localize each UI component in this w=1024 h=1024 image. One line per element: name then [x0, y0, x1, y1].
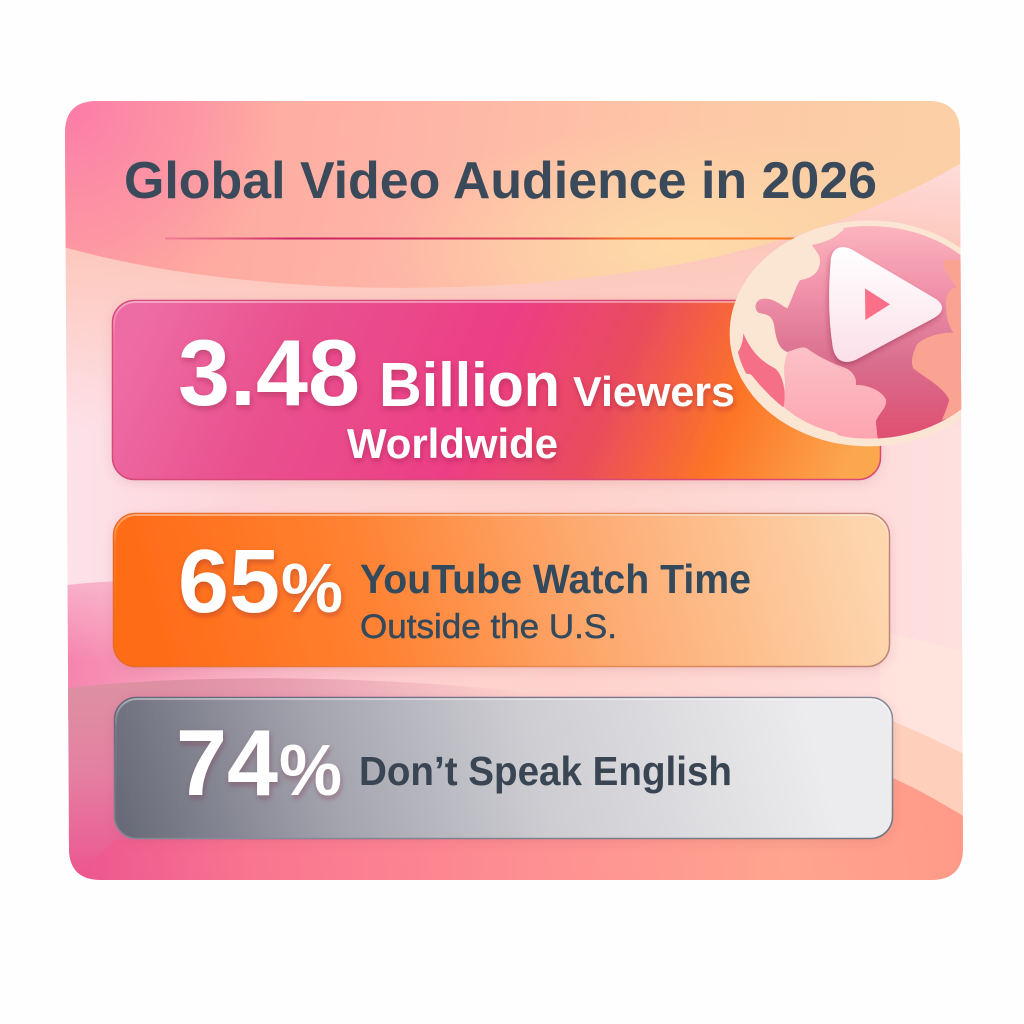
stat: 3.48 Billion Viewers: Viewers — [573, 368, 735, 415]
title divider — [165, 238, 798, 240]
globe sea — [756, 223, 967, 440]
label: YouTube Watch Time Outside the U.S.: Outside the U.S. — [360, 608, 617, 646]
icon: globe with play button — [730, 220, 962, 446]
stat: 74%: 74 — [176, 710, 278, 815]
stat: 3.48 Billion Viewers: 3.48 — [178, 320, 360, 425]
lower left land — [738, 334, 785, 408]
stat: 3.48 Billion Viewers — [178, 320, 735, 467]
stat: 74%: % — [279, 731, 342, 811]
label: Don't Speak English: Don’t Speak English — [359, 748, 732, 794]
stat: 74% — [176, 710, 342, 815]
card: 3.48 billion viewers — [112, 300, 880, 480]
panel background — [60, 90, 970, 890]
stat: 65% — [178, 532, 343, 632]
card: 65% watch time — [114, 514, 890, 666]
card: 74% non-English — [114, 698, 892, 838]
title: Global Video Audience in 2026 — [124, 152, 877, 210]
label: YouTube Watch Time Outside the U.S. — [360, 556, 751, 646]
infographic — [65, 101, 963, 880]
stat: 65%: % — [281, 549, 343, 627]
play button — [829, 247, 942, 362]
bottom ring arc — [748, 379, 833, 437]
stat: 3.48 Billion Viewers: Worldwide — [347, 420, 558, 467]
globe continents — [730, 223, 967, 440]
play triangle — [865, 288, 890, 320]
right land — [912, 260, 962, 420]
lower land — [783, 348, 886, 440]
stat: 3.48 Billion Viewers: Billion — [379, 351, 560, 420]
globe ring and pale land — [730, 220, 962, 446]
stat: 65%: 65 — [178, 532, 280, 632]
label: YouTube Watch Time Outside the U.S.: YouTube Watch Time — [360, 556, 751, 602]
